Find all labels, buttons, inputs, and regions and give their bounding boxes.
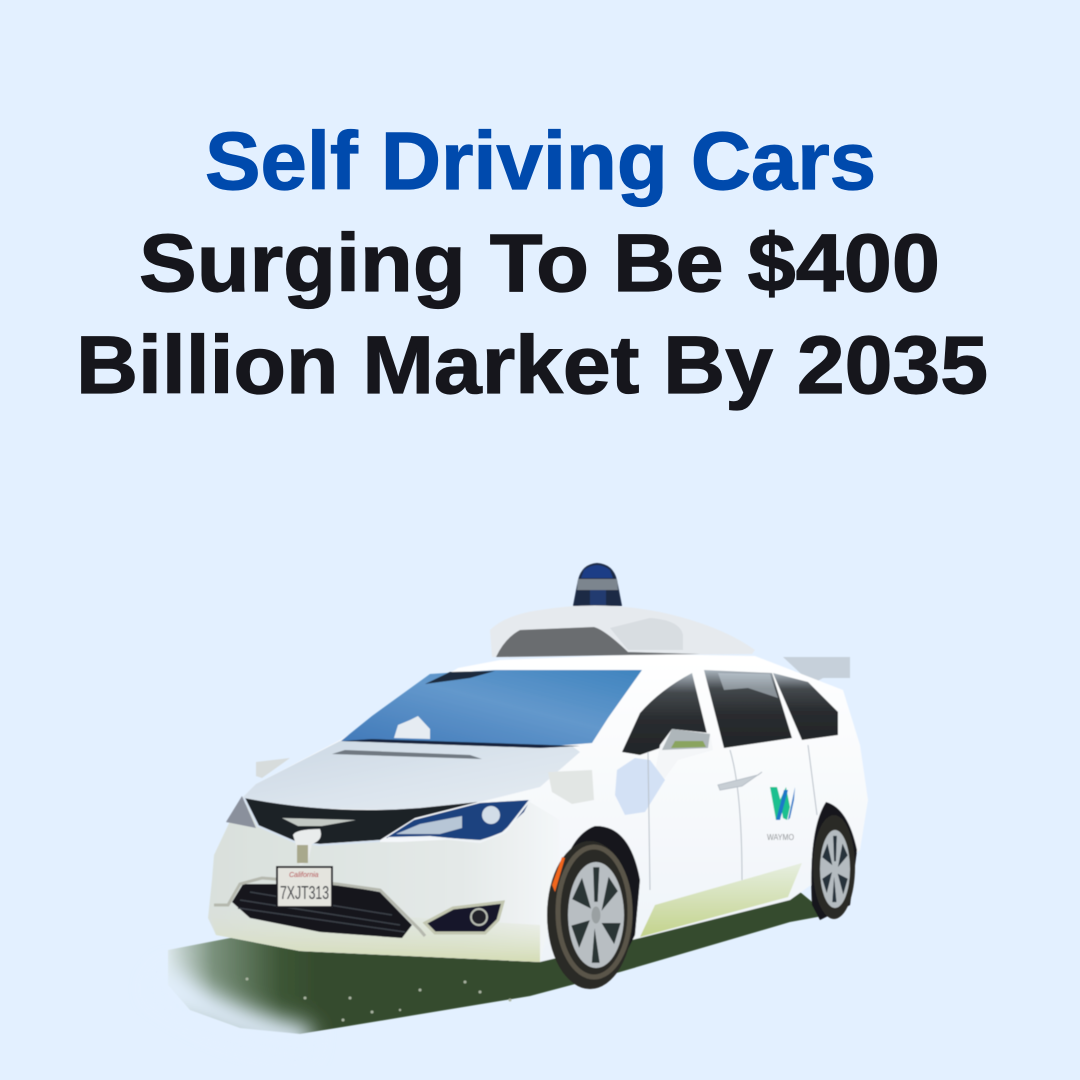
windshield bbox=[341, 670, 642, 748]
sliding door window bbox=[704, 670, 792, 748]
car photo illustration bbox=[160, 563, 868, 1042]
plate number: 7XJT313 bbox=[280, 883, 329, 903]
grass shadow under car bbox=[160, 892, 828, 1042]
door reflection bbox=[615, 758, 665, 815]
front wheel bbox=[547, 826, 640, 989]
side windows bbox=[622, 670, 838, 755]
hood crease bbox=[332, 750, 482, 759]
title line: Billion Market By 2035: Billion Market By 2035 bbox=[76, 320, 988, 411]
lower sill bbox=[640, 863, 802, 937]
door lines and handle bbox=[648, 745, 817, 890]
turn marker bbox=[552, 857, 565, 892]
hood bbox=[240, 741, 580, 810]
roof sensor pod bbox=[490, 605, 755, 657]
front nose sensor bbox=[293, 829, 321, 865]
right headlight bbox=[386, 800, 530, 842]
wing mirror bbox=[655, 729, 713, 782]
lidar dome bbox=[573, 563, 622, 606]
front bumper bbox=[208, 800, 560, 962]
fender sensor bbox=[548, 770, 594, 804]
sky reflection in sliding door window bbox=[718, 673, 778, 698]
title bbox=[76, 116, 988, 411]
rear window bbox=[773, 673, 838, 740]
car body bbox=[208, 654, 868, 962]
fog light bbox=[425, 902, 503, 933]
left side marker sensor bbox=[256, 758, 290, 778]
license plate bbox=[277, 867, 332, 907]
rear wheel bbox=[811, 802, 857, 920]
plate state: California bbox=[289, 872, 319, 879]
left headlight bbox=[226, 796, 256, 828]
title line: Surging To Be $400: Surging To Be $400 bbox=[139, 218, 940, 309]
front door window bbox=[622, 673, 710, 755]
lower grille bbox=[214, 878, 425, 938]
rear spoiler sensor bbox=[783, 657, 850, 684]
Waymo logo bbox=[767, 787, 795, 842]
title line: Self Driving Cars: Self Driving Cars bbox=[205, 116, 876, 207]
Waymo wordmark: WAYMO bbox=[767, 833, 794, 842]
upper grille bbox=[244, 798, 478, 845]
